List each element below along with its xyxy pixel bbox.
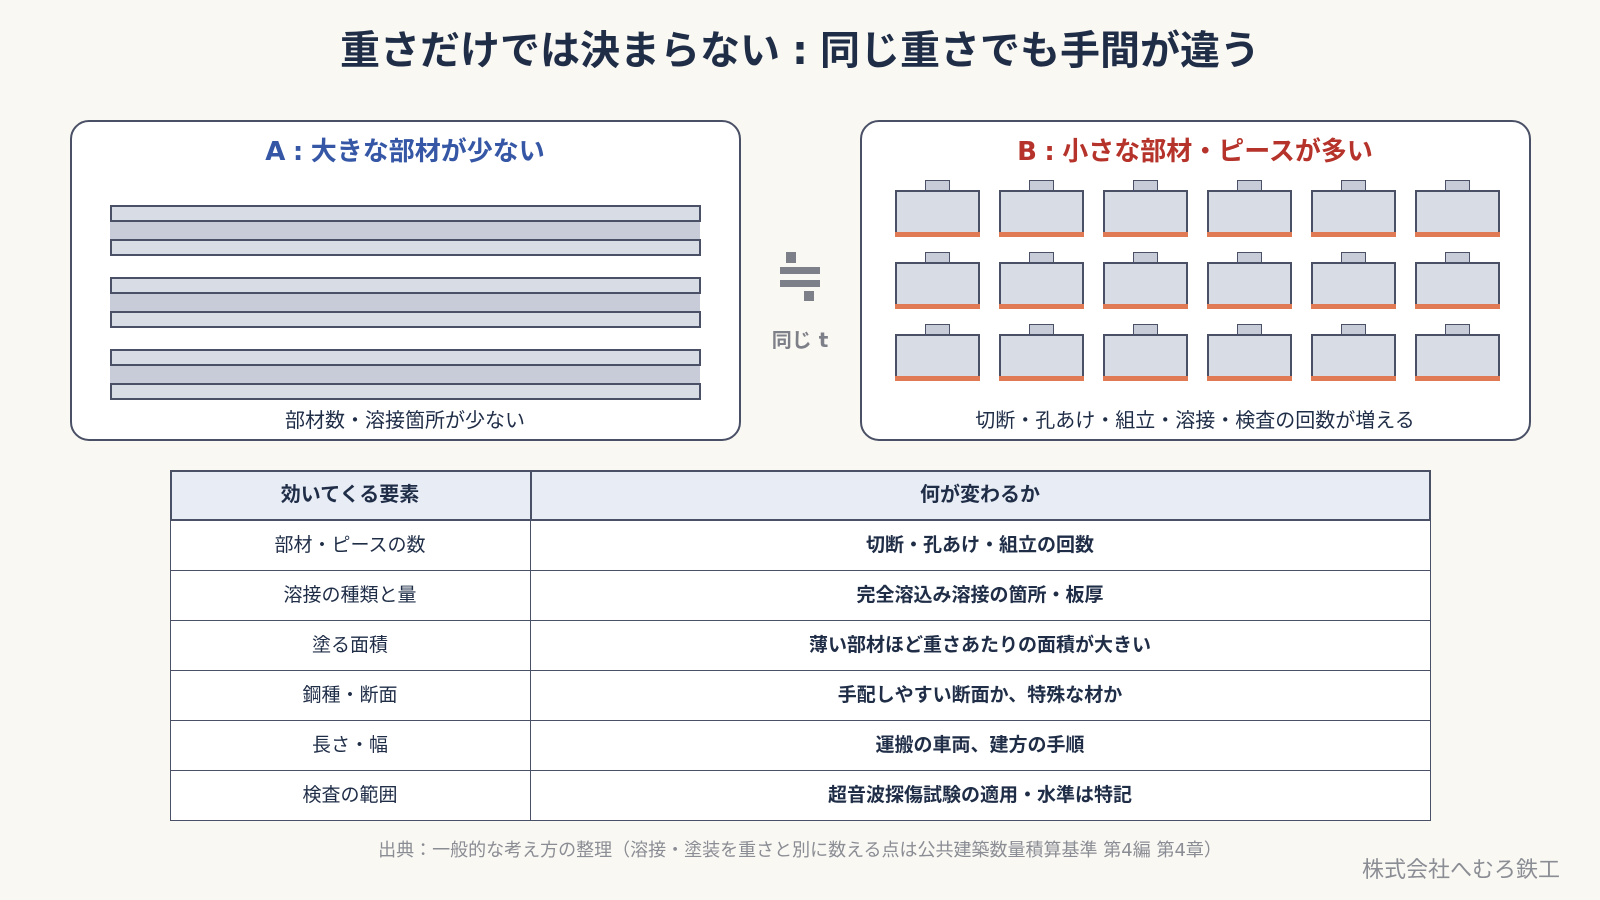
table header: 効いてくる要素 <box>281 482 419 506</box>
caption: A: 部材数・溶接箇所が少ない <box>285 408 525 432</box>
panel: B small pieces <box>861 121 1530 440</box>
row 3: 塗る面積 <box>312 634 388 656</box>
row 4: 鋼種・断面 <box>302 684 398 706</box>
row 4: 手配しやすい断面か、特殊な材か <box>838 684 1122 706</box>
brand: 株式会社へむろ鉄工 <box>1362 858 1560 883</box>
row 3 <box>312 633 1151 656</box>
row 5 <box>312 733 1085 756</box>
row 2 <box>283 584 1104 606</box>
icon: approximately equal symbol <box>780 252 820 301</box>
row 6: 超音波探傷試験の適用・水準は特記 <box>828 784 1132 806</box>
row 2: 完全溶込み溶接の箇所・板厚 <box>856 584 1104 606</box>
title: 重さだけでは決まらない : 同じ重さでも手間が違う <box>340 28 1260 74</box>
row 5: 運搬の車両、建方の手順 <box>875 733 1085 756</box>
table <box>170 471 1431 821</box>
piece grid <box>895 180 1500 381</box>
panel: A large members <box>71 121 740 440</box>
table header <box>171 471 1430 520</box>
table header: 何が変わるか <box>920 482 1040 506</box>
row 1: 部材・ピースの数 <box>274 534 426 556</box>
heading: B: B : 小さな部材・ピースが多い <box>1017 136 1373 167</box>
row 1 <box>274 534 1094 556</box>
label: same tonnage: 同じ t <box>772 328 829 352</box>
row 2: 溶接の種類と量 <box>283 584 417 606</box>
caption: B: 切断・孔あけ・組立・溶接・検査の回数が増える <box>975 408 1415 432</box>
row 4 <box>302 684 1122 706</box>
row 6: 検査の範囲 <box>302 784 398 806</box>
member 2 <box>110 278 700 327</box>
member 1 <box>110 206 700 255</box>
source note: 出典：一般的な考え方の整理（溶接・塗装を重さと別に数える点は公共建築数量積算基準 第4編 第4章） <box>378 840 1222 861</box>
row 1: 切断・孔あけ・組立の回数 <box>866 534 1094 556</box>
row 5: 長さ・幅 <box>312 734 388 756</box>
row 3: 薄い部材ほど重さあたりの面積が大きい <box>809 633 1151 656</box>
member 3 <box>110 350 700 399</box>
row 6 <box>302 784 1132 806</box>
heading: A: A : 大きな部材が少ない <box>265 136 545 167</box>
